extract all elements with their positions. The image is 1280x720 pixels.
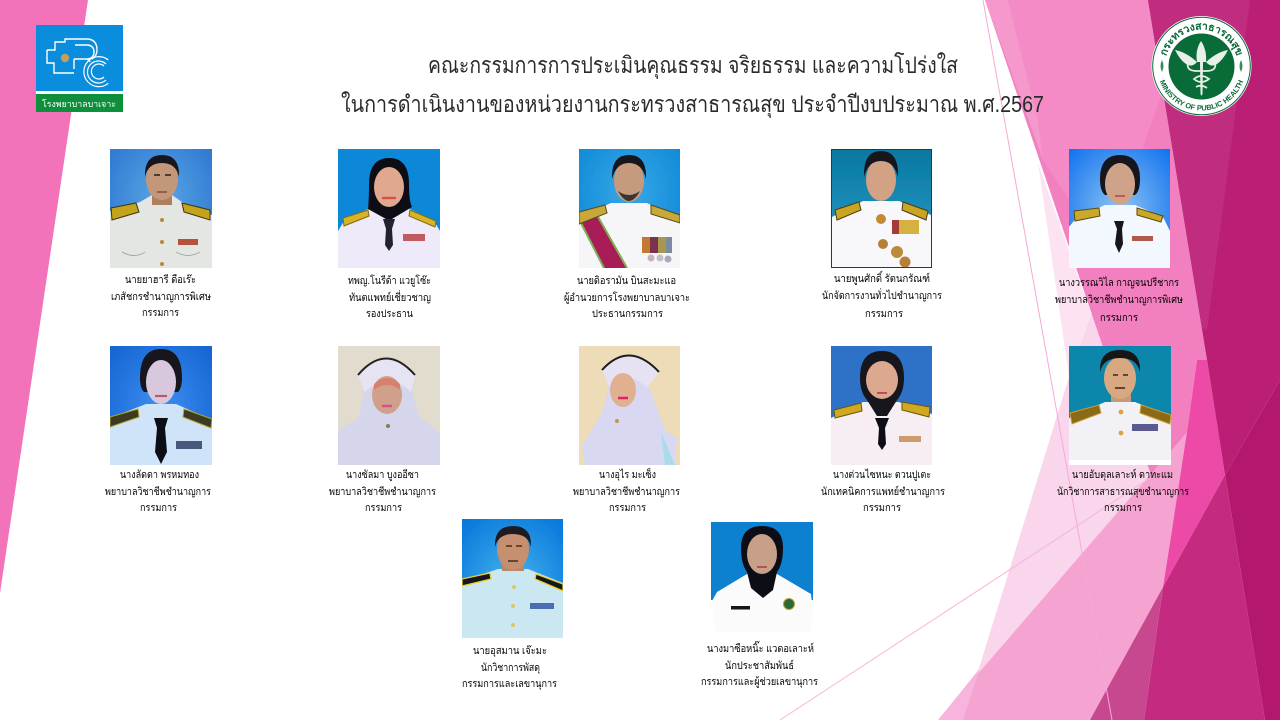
- caption: member 9: นางต่วนไซหนะ ตวนปูเตะ: [833, 468, 931, 481]
- photo: member 6: [110, 346, 212, 465]
- caption: member 3: ประธานกรรมการ: [592, 308, 663, 320]
- member 7: [329, 346, 440, 514]
- caption: member 4: [822, 270, 942, 320]
- photo: member 12: [711, 522, 813, 632]
- logo caption: โรงพยาบาลบาเจาะ: [42, 99, 116, 109]
- title: คณะกรรมการการประเมินคุณธรรม จริยธรรม และความโปร่งใส: [428, 52, 958, 79]
- member 8: [573, 346, 680, 514]
- caption: member 2: รองประธาน: [366, 308, 413, 320]
- photo: member 2: [338, 149, 440, 268]
- member 12: [701, 522, 818, 688]
- caption: member 4: นายพูนศักดิ์ รัตนกรัณฑ์: [834, 270, 930, 285]
- caption: member 5: [1055, 276, 1183, 324]
- caption: member 7: กรรมการ: [365, 502, 402, 514]
- caption: member 1: [111, 273, 211, 319]
- caption: member 1: นายยาฮารี ดือเร๊ะ: [125, 273, 196, 286]
- caption: member 9: [821, 468, 945, 514]
- member 5: [1055, 149, 1183, 324]
- caption: member 2: ทพญ.โนรีด้า แวยูโซ๊ะ: [348, 274, 431, 287]
- caption: member 12: นางมาซือหนิ๊ะ แวดอเลาะห์: [707, 640, 814, 655]
- member 1: [110, 149, 212, 319]
- photo: member 3: [579, 149, 680, 268]
- right faceted background: [780, 0, 1280, 720]
- caption: member 11: [462, 644, 557, 690]
- photo: member 10: [1069, 346, 1171, 465]
- caption: member 3: นายดิอรามัน บินสะมะแอ: [577, 275, 676, 287]
- caption: member 6: พยาบาลวิชาชีพชำนาญการ: [105, 485, 211, 498]
- caption: member 8: [573, 467, 680, 514]
- caption: member 6: [105, 469, 211, 514]
- caption: member 10: นายอับดุลเลาะห์ ดาทะแม: [1072, 468, 1173, 481]
- photo: member 5: [1069, 149, 1170, 268]
- caption: member 11: กรรมการและเลขานุการ: [462, 678, 557, 690]
- photo: member 4: [831, 149, 932, 268]
- member 9: [821, 346, 945, 514]
- caption: member 11: นักวิชาการพัสดุ: [481, 662, 540, 674]
- photo: member 11: [462, 519, 563, 638]
- caption: member 5: กรรมการ: [1100, 312, 1138, 324]
- caption: member 9: นักเทคนิคการแพทย์ชำนาญการ: [821, 485, 945, 498]
- member 11: [462, 519, 563, 690]
- member 3: [564, 149, 690, 320]
- photo: member 7: [338, 346, 440, 465]
- caption: member 8: กรรมการ: [609, 502, 646, 514]
- left pink wedge: [0, 0, 88, 593]
- caption: member 5: พยาบาลวิชาชีพชำนาญการพิเศษ: [1055, 293, 1183, 306]
- logo: Ministry of Public Health: MINISTRY OF PUBLIC HEALTH: [1160, 80, 1244, 110]
- caption: member 1: เภสัชกรชำนาญการพิเศษ: [111, 291, 211, 303]
- caption: member 12: นักประชาสัมพันธ์: [725, 659, 794, 672]
- caption: member 10: นักวิชาการสาธารณสุขชำนาญการ: [1057, 486, 1189, 498]
- caption: member 5: นางวรรณวิไล กาญจนปรีชากร: [1059, 276, 1179, 289]
- caption: member 2: ทันตแพทย์เชี่ยวชาญ: [349, 290, 431, 304]
- caption: member 6: กรรมการ: [140, 502, 177, 514]
- caption: member 8: พยาบาลวิชาชีพชำนาญการ: [573, 485, 680, 498]
- member 4: [822, 149, 942, 320]
- caption: member 7: นางซัลมา บูงออีซา: [346, 468, 419, 481]
- caption: member 4: นักจัดการงานทั่วไปชำนาญการ: [822, 288, 942, 302]
- photo: member 9: [831, 346, 932, 465]
- caption: member 3: ผู้อำนวยการโรงพยาบาลบาเจาะ: [564, 291, 690, 304]
- caption: member 10: [1057, 468, 1189, 514]
- caption: member 6: นางลัดดา พรหมทอง: [120, 469, 199, 481]
- caption: member 11: นายอุสมาน เจ๊ะมะ: [473, 644, 547, 657]
- logo: Ministry of Public Health: [1152, 16, 1252, 116]
- caption: member 3: [564, 275, 690, 320]
- member 6: [105, 346, 212, 514]
- caption: member 12: กรรมการและผู้ช่วยเลขานุการ: [701, 676, 818, 688]
- title: ในการดำเนินงานของหน่วยงานกระทรวงสาธารณสุข ประจำปีงบประมาณ พ.ศ.2567: [341, 91, 1044, 118]
- photo: member 1: [110, 149, 212, 268]
- caption: member 8: นางอุไร มะเซ็ง: [599, 467, 656, 481]
- caption: member 10: กรรมการ: [1104, 502, 1142, 514]
- caption: member 9: กรรมการ: [863, 502, 901, 514]
- caption: member 7: [329, 468, 436, 514]
- caption: member 2: [348, 274, 431, 320]
- photo: member 8: [579, 346, 680, 465]
- title: [341, 52, 1044, 118]
- caption: member 7: พยาบาลวิชาชีพชำนาญการ: [329, 485, 436, 498]
- caption: member 12: [701, 640, 818, 688]
- logo: Bacho Hospital: [36, 25, 123, 112]
- member 2: [338, 149, 440, 320]
- caption: member 4: กรรมการ: [865, 308, 903, 320]
- member 10: [1057, 346, 1189, 514]
- logo: Ministry of Public Health: กระทรวงสาธารณสุข: [1161, 23, 1242, 56]
- caption: member 1: กรรมการ: [142, 307, 179, 319]
